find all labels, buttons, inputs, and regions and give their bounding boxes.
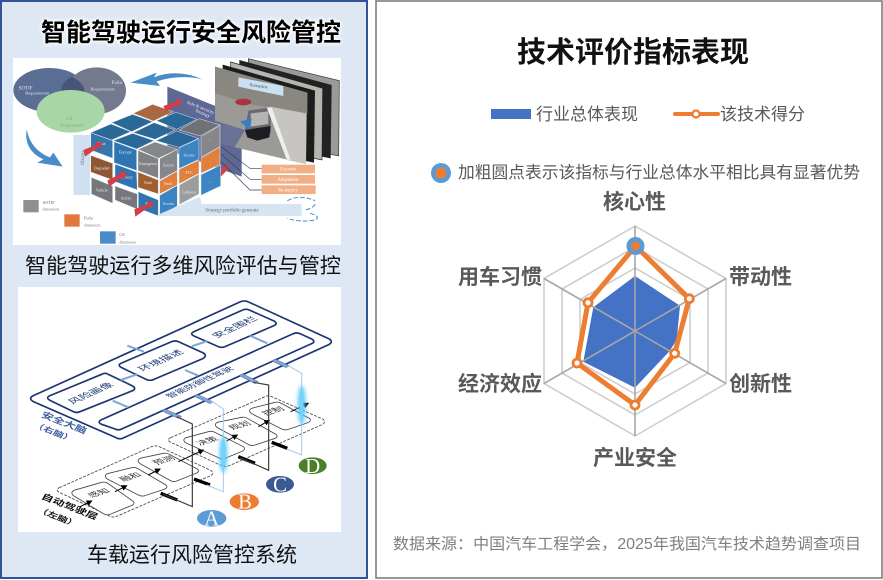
figure: in-vehicle risk control system: 自动驾驶层 [39,491,100,522]
technology score line [577,246,689,405]
cube legend: dimensions [43,208,60,212]
figure: multidimensional risk cube [13,58,341,245]
badges A B C D: B [238,492,252,514]
figure: multidimensional risk cube: Re-deploy [278,188,298,193]
cube legend [23,200,137,244]
cube tile labels: Action [163,163,174,168]
safety brain layer (right brain) [31,301,331,439]
cube tile labels: Active [121,195,132,200]
axis labels [458,190,792,470]
figure: in-vehicle risk control system: 规划 [226,419,254,432]
caption: multidimensional assessment: 智能驾驶运行多维风险评估与管控 [25,255,341,278]
caption: in-vehicle system: 车载运行风险管控系统 [87,544,297,567]
cube tile labels: ... [209,179,212,184]
cube tile labels [94,136,212,206]
note on highlighted dots: 加粗圆点表示该指标与行业总体水平相比具有显著优势 [458,163,860,182]
cube tile labels: ... [208,136,211,141]
figure: in-vehicle risk control system: 控制 [259,405,288,417]
legend: industry: 行业总体表现 [536,105,638,124]
badges A B C D [197,456,327,531]
safety brain labels: 风险画像 [65,381,117,406]
vertical link lines [163,382,269,507]
cube tile labels: Vehicle [96,188,108,193]
badges A B C D: A [204,509,219,531]
radar grid [544,226,726,436]
figure: in-vehicle risk control system [18,287,341,532]
cyan glows [220,386,305,473]
badges A B C D: C [273,475,287,497]
cube tile labels: Access [163,201,174,206]
wall dimension strip [73,135,90,195]
cube top [91,104,220,158]
venn diagram: SOTIF [19,86,33,91]
venn diagram: FuSa [112,81,123,86]
cube legend: SOTIF [43,200,55,205]
score markers [573,295,693,409]
cube red arrows [83,99,231,217]
cube tile labels: Fault [164,181,173,186]
strategy output boxes [262,165,316,194]
cube legend: CS [119,232,125,237]
highlighted top dot [626,237,644,255]
radar chart [458,190,792,470]
figure: multidimensional risk cube: Adaptation [278,178,299,183]
axis labels: 带动性 [729,266,792,289]
safety brain labels: （右脑） [32,420,76,443]
cube tile labels: Data [98,141,106,146]
figure: multidimensional risk cube: Uncover [280,168,296,173]
cube legend: FuSa [84,215,93,220]
cube tile labels: Degraded [94,165,109,170]
figure: multidimensional risk cube: Strategy [79,150,84,166]
cube faces [91,125,221,216]
safety brain labels: 安全大脑 [39,409,89,436]
safety brain labels: 环境描述 [135,348,187,373]
axis labels: 经济效应 [458,372,542,396]
safety brain labels: 智能防御性驾驶 [163,365,236,399]
axis labels: 用车习惯 [458,266,542,289]
safety brain labels [32,315,261,443]
safety brain labels: 安全围栏 [209,315,261,340]
cube tile labels: Memory [119,174,133,179]
cube tile labels: Access [183,153,195,158]
industry area [583,276,680,388]
cube tile labels: Anti [145,201,153,206]
legend [491,105,805,124]
panel: right background [376,1,882,578]
cube tile labels: Emergency [139,161,157,166]
figure: in-vehicle risk control system: 融和 [117,472,145,483]
layer link arrows [113,336,267,407]
figure: in-vehicle risk control system: 预测 [150,455,178,467]
badges A B C D: D [305,456,320,478]
data source: 数据来源：中国汽车工程学会，2025年我国汽车技术趋势调查项目 [393,535,861,553]
cube tile labels: ... [208,158,211,163]
figure: in-vehicle risk control system: 决策 [193,435,222,447]
venn diagram: CS [67,117,73,122]
cube tile labels: FTC [185,170,193,175]
strategy portfolio bar [155,197,317,221]
axis labels: 创新性 [729,372,792,396]
left panel heading: 智能驾驶运行安全风险管控 [41,19,341,47]
figure: in-vehicle risk control system: 感知 [85,487,113,499]
legend: industry [491,105,638,124]
axis labels: 产业安全 [593,446,677,470]
legend: technology score [675,105,805,124]
back strategy plane [167,87,242,177]
autonomous driving layer (left brain) [57,396,325,517]
arrows [26,73,203,167]
figure: multidimensional risk cube: Strategy [194,109,211,120]
venn diagram: Requirements [91,87,115,92]
cube tile labels: Encrypt [119,149,133,154]
left panel heading: 智能驾驶运行安全风险管控 [41,19,341,47]
cube tile labels: Fault [144,180,153,185]
radar spokes [544,226,726,436]
venn diagram: Requirements [60,123,84,128]
venn diagram: Requirements [25,91,50,96]
image stack: Scenarios [249,83,268,91]
cube tile labels: Collision [182,189,196,194]
venn diagram [13,67,126,133]
figure: in-vehicle risk control system: （左脑） [36,505,80,528]
strategy portfolio bar: Strategy portfolio generate [205,208,260,213]
image stack [215,59,339,164]
right panel heading: 技术评价指标表现 [517,36,749,69]
cube legend: dimensions [84,224,101,228]
panel: left background [1,1,367,578]
cube legend: dimensions [119,240,137,244]
axis labels: 核心性 [603,190,666,214]
legend: technology score: 该技术得分 [720,105,805,124]
black flow arrows [80,403,308,507]
figure: multidimensional risk cube: Safe & security [186,101,215,116]
